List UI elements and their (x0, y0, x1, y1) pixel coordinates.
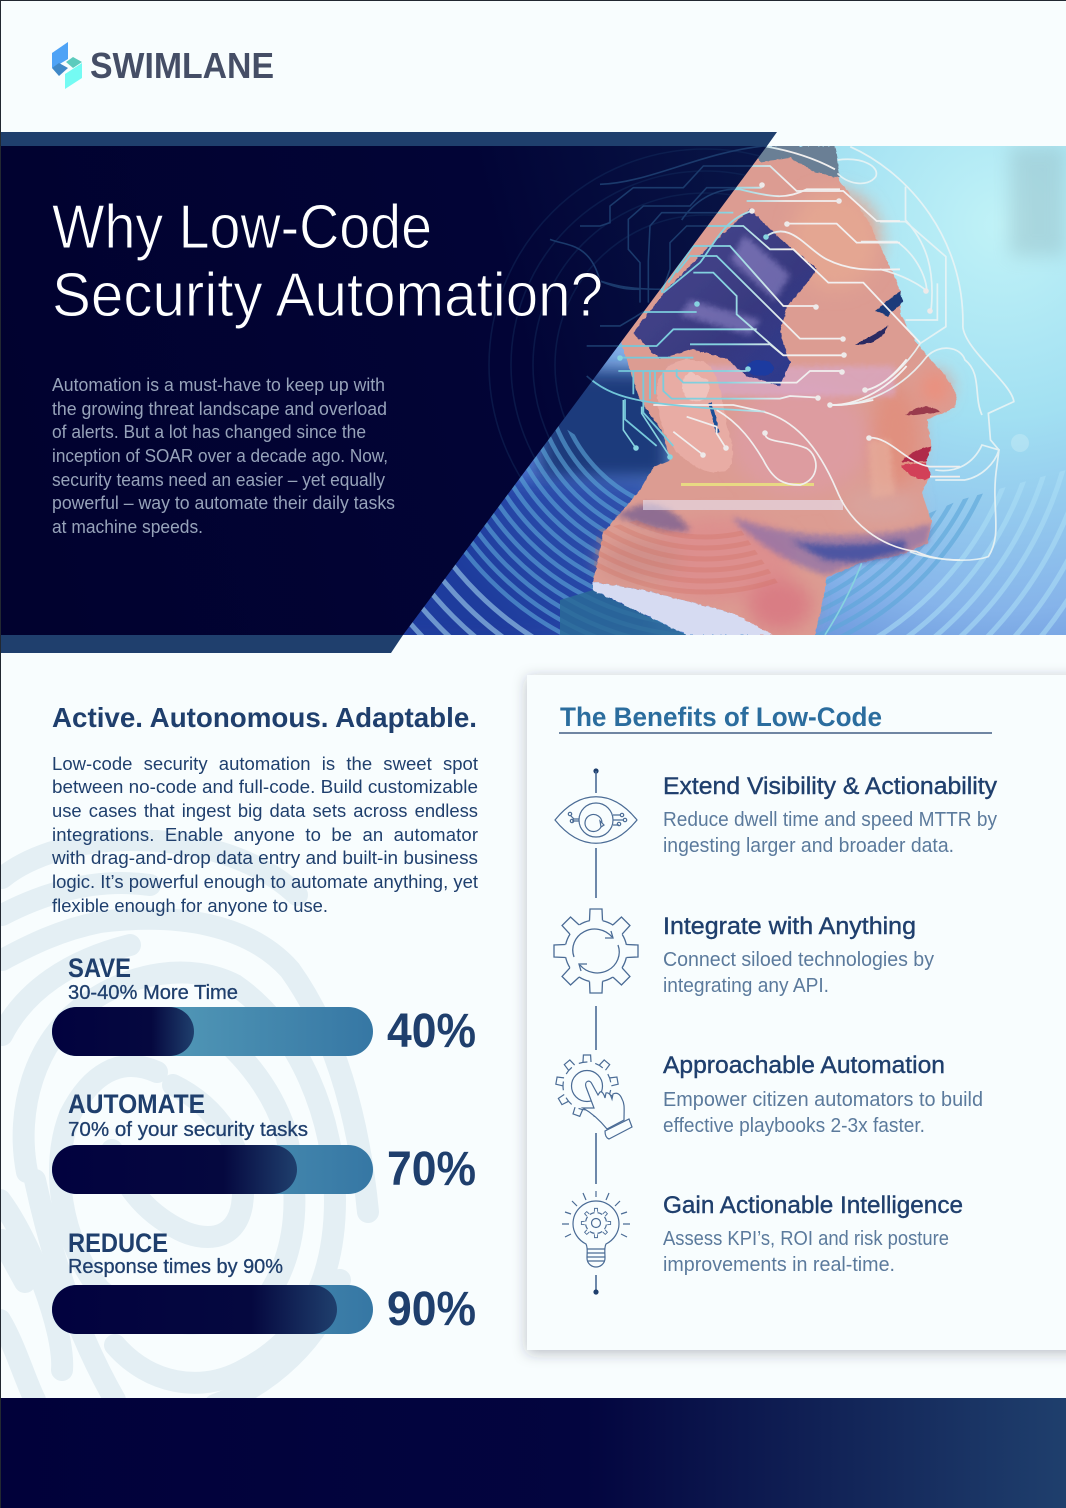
circuit end dots (617, 182, 1029, 460)
benefit: approachable automation: effective playbooks 2-3x faster. (663, 1115, 925, 1137)
benefit: approachable automation (663, 1052, 983, 1137)
stat: automate 70% (52, 1089, 476, 1196)
panel: benefits of low-code (527, 675, 1066, 1350)
benefit: gain actionable intelligence: Assess KPI’s, ROI and risk posture (663, 1228, 949, 1250)
icon: eye (555, 797, 637, 843)
icon: Swimlane mark (52, 42, 82, 89)
face and neck painting (593, 146, 957, 640)
eye (855, 325, 888, 345)
benefit: extend visibility (663, 773, 997, 857)
lips (901, 446, 932, 462)
hero intro text: inception of SOAR over a decade ago. Now, (52, 445, 388, 466)
hero title: Why Low-Code (52, 193, 432, 262)
left body text: integrations. Enable anyone to be an automator (52, 824, 478, 845)
left body text: flexible enough for anyone to use. (52, 895, 328, 916)
top band (0, 132, 777, 146)
dark diagonal overlay (0, 146, 767, 635)
brow (875, 291, 903, 316)
hero intro text: of alerts. But a lot has changed since the (52, 421, 366, 442)
dim circuits and rings inside dark panel (488, 146, 767, 478)
footer band (0, 1398, 1066, 1508)
icon: gear with pointing hand (556, 1055, 632, 1139)
left body text (51, 753, 478, 916)
icon: gear with arrows (554, 909, 638, 993)
hero title: Security Automation? (52, 261, 603, 330)
stat: save 40%: 30-40% More Time (68, 982, 238, 1004)
stat: automate 70%: AUTOMATE (68, 1089, 205, 1119)
hero image: face with circuit overlay (403, 146, 1066, 635)
stat: reduce 90%: 90% (387, 1283, 476, 1336)
hero intro text (52, 374, 395, 537)
hero intro text: Automation is a must-have to keep up with (52, 374, 385, 395)
left body text: Low-code security automation is the sweet spot (52, 753, 478, 774)
benefit: integrate with anything (663, 913, 934, 997)
benefit: extend visibility: Extend Visibility & Actionability (663, 773, 997, 800)
stat: save 40% (52, 953, 476, 1058)
fingerprint background (0, 840, 368, 1405)
stat: automate 70%: 70% (387, 1143, 476, 1196)
benefit: extend visibility: ingesting larger and broader data. (663, 835, 954, 857)
benefit: extend visibility: Reduce dwell time and speed MTTR by (663, 809, 997, 831)
collar (593, 582, 773, 635)
ear (657, 359, 733, 473)
left body text: logic. It’s powerful enough to automate anything, yet (52, 871, 478, 892)
left body text: between no-code and full-code. Build customizable (52, 776, 478, 797)
benefit: gain actionable intelligence: improvements in real-time. (663, 1254, 895, 1276)
stat: automate 70%: 70% of your security tasks (68, 1119, 308, 1141)
jacket (560, 590, 686, 635)
hero intro text: security teams need an easier – yet equally (52, 469, 386, 490)
stat: save 40%: SAVE (68, 953, 131, 983)
benefit: integrate with anything: Connect siloed technologies by (663, 949, 934, 971)
circuit lines on the face (592, 146, 920, 447)
logo: Swimlane (52, 42, 274, 89)
left body text: use cases that ingest big data sets across endless (52, 800, 478, 821)
neck ring stripes (594, 520, 778, 594)
benefit: approachable automation: Empower citizen automators to build (663, 1089, 983, 1111)
stat: reduce 90% (52, 1228, 476, 1336)
hero intro text: the growing threat landscape and overload (52, 398, 387, 419)
benefit: integrate with anything: Integrate with Anything (663, 913, 916, 940)
bottom band (0, 635, 403, 653)
yellow line (681, 483, 814, 486)
benefit: integrate with anything: integrating any API. (663, 975, 829, 997)
stat: save 40%: 40% (387, 1005, 476, 1058)
benefit: gain actionable intelligence: Gain Actionable Intelligence (663, 1192, 963, 1219)
benefit: approachable automation: Approachable Automation (663, 1052, 945, 1079)
stat: reduce 90%: REDUCE (68, 1228, 168, 1258)
hero intro text: at machine speeds. (52, 516, 203, 537)
stat: reduce 90%: Response times by 90% (68, 1256, 283, 1278)
benefits heading: The Benefits of Low-Code (560, 702, 882, 732)
top hair (758, 146, 840, 178)
left body text: with drag-and-drop data entry and built-in business (51, 847, 478, 868)
hero title (52, 193, 603, 330)
icon: light bulb with gear (562, 1191, 630, 1267)
timeline connector lines (593, 768, 599, 1295)
benefit: gain actionable intelligence (663, 1192, 963, 1276)
cheek crease (868, 440, 895, 498)
hero panel (1, 132, 1066, 653)
nostril (905, 407, 940, 415)
logo wordmark: SWIMLANE (90, 45, 274, 86)
hair (633, 209, 817, 386)
translucent band across jaw (643, 500, 843, 510)
left heading: Active. Autonomous. Adaptable. (52, 702, 477, 733)
hero intro text: powerful – way to automate their daily tasks (52, 492, 395, 513)
